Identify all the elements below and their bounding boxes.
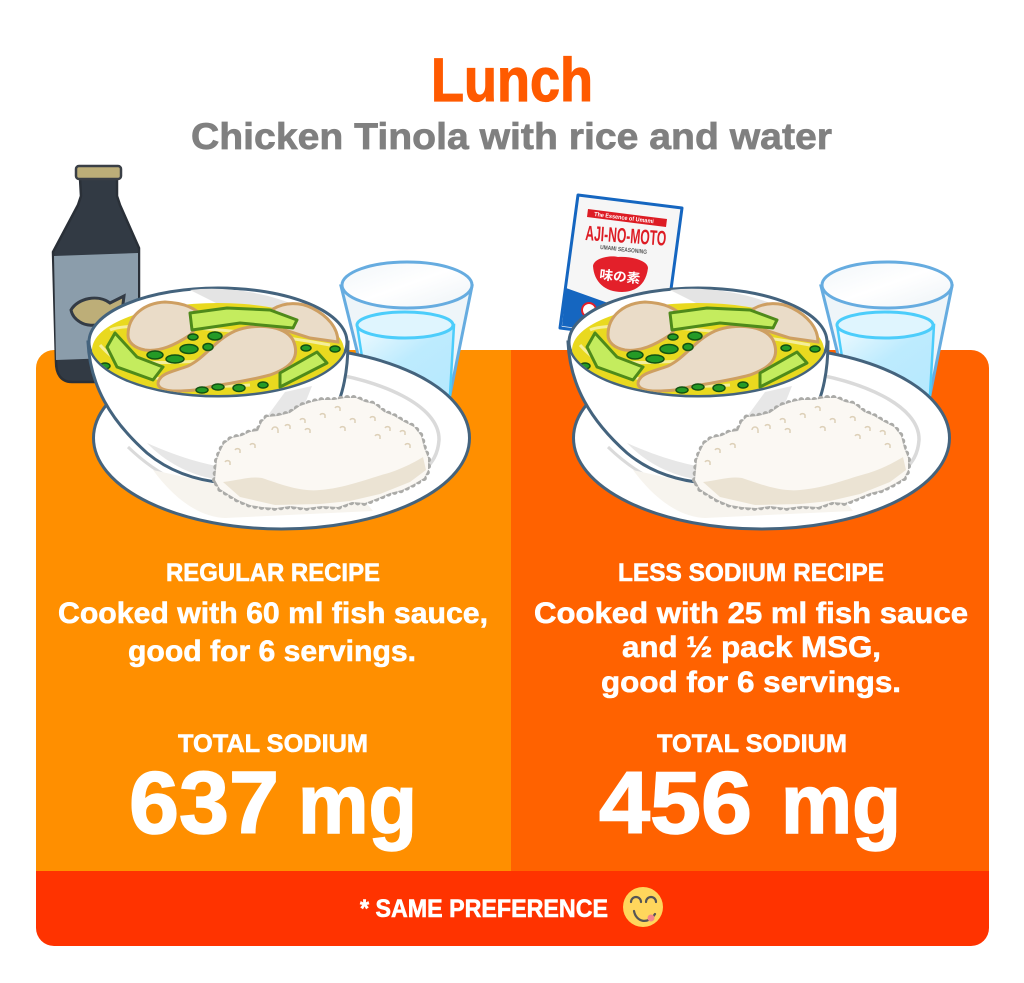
description: less sodium recipe: Cooked with 25 ml fish sauce <box>534 597 968 630</box>
icon: MSG packet <box>560 195 682 341</box>
description line 2: regular recipe: good for 6 servings. <box>128 635 416 668</box>
value: 456 mg <box>599 753 901 852</box>
green leaves <box>100 332 340 393</box>
label: total sodium less sodium: TOTAL SODIUM <box>657 730 847 758</box>
panel: less sodium recipe background <box>511 350 989 871</box>
chicken pieces <box>608 302 818 391</box>
icon: MSG packet: AJI-NO-MOTO <box>585 222 667 251</box>
plate left <box>94 347 470 529</box>
heading: regular recipe: REGULAR RECIPE <box>166 559 380 587</box>
soup broth <box>572 302 824 397</box>
soup bowl left <box>88 288 348 483</box>
footer label: * SAME PREFERENCE <box>360 895 608 923</box>
plate right <box>574 347 950 529</box>
icon: MSG packet: 味の素 <box>599 267 641 286</box>
description line 3: less sodium recipe: good for 6 servings. <box>601 666 901 699</box>
text: less sodium recipe <box>534 559 968 852</box>
icon: water glass left <box>341 262 472 395</box>
value: 637 mg <box>129 753 417 852</box>
description: regular recipe: Cooked with 60 ml fish sauce, <box>58 597 488 630</box>
rice left <box>215 398 428 508</box>
text: regular recipe <box>58 559 488 852</box>
green leaves <box>580 332 820 393</box>
value: 637 mg: mg <box>298 757 417 851</box>
value: 456 mg: 456 <box>599 753 752 852</box>
green vegetables <box>587 308 807 387</box>
soup broth <box>92 302 344 397</box>
icon: yum face emoji <box>623 887 663 927</box>
icon: MSG packet: The Essence of Umami <box>594 212 654 225</box>
heading: less sodium recipe: LESS SODIUM RECIPE <box>618 559 884 587</box>
rice right <box>695 398 908 508</box>
title: Lunch <box>431 46 593 114</box>
description line 2: less sodium recipe: and ½ pack MSG, <box>622 631 881 664</box>
subtitle: Chicken Tinola with rice and water <box>191 116 832 157</box>
icon: water glass right <box>821 262 952 395</box>
panel: same preference footer <box>36 871 989 946</box>
icon: fish sauce bottle <box>53 166 139 382</box>
chicken pieces <box>128 302 338 391</box>
soup bowl right <box>568 288 828 483</box>
green vegetables <box>107 308 327 387</box>
label: total sodium regular: TOTAL SODIUM <box>178 730 368 758</box>
value: 456 mg: mg <box>781 757 901 851</box>
value: 637 mg: 637 <box>129 753 279 852</box>
icon: MSG packet: UMAMI SEASONING <box>600 245 647 256</box>
panel: regular recipe background <box>36 350 511 871</box>
